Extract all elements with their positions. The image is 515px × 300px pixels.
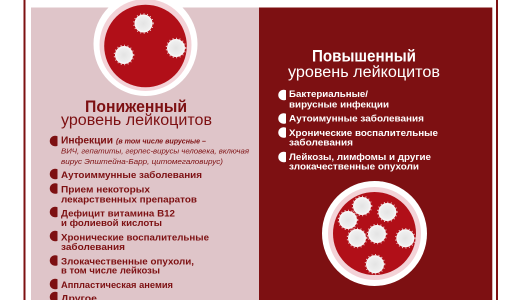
list: causes of high level (278, 89, 438, 172)
panel: low leukocytes (31, 0, 259, 300)
heading: high level (288, 48, 440, 81)
list: causes of high level: злокачественные опухоли (289, 161, 419, 172)
heading: low level: Пониженный (85, 98, 187, 116)
heading: low level (61, 98, 212, 129)
list: causes of low level: и фолиевой кислоты (61, 218, 162, 229)
list: causes of high level: Лейкозы, лимфомы и другие (289, 152, 431, 163)
list: causes of low level: Инфекции (61, 134, 113, 146)
heading: low level: уровень лейкоцитов (61, 112, 212, 129)
heading: high level: Повышенный (312, 48, 416, 66)
list: causes of high level: Бактериальные/ (289, 89, 368, 100)
list: causes of low level: (в том числе вирусные – (116, 136, 206, 145)
side rule right (496, 0, 498, 300)
heading: high level: уровень лейкоцитов (288, 64, 440, 81)
list: causes of low level: Аппластическая анемия (61, 280, 173, 291)
list: causes of low level (50, 134, 249, 300)
list: causes of low level: Прием некоторых (61, 185, 151, 196)
list: causes of low level: Злокачественные опухоли, (61, 256, 194, 267)
illustration: three white cells in a circle (94, 0, 198, 96)
list: causes of low level: лекарственных препаратов (61, 194, 197, 205)
side rule left (24, 0, 26, 300)
list: causes of low level: вирус Эпштейна-Барр, цитомегаловирус) (61, 157, 224, 166)
list: causes of high level: Хронические воспалительные (289, 128, 438, 139)
list: causes of low level: Хронические воспалительные (61, 233, 209, 244)
panel: high leukocytes (259, 8, 492, 300)
list: causes of low level: заболевания (61, 242, 125, 253)
list: causes of low level: Аутоиммунные заболевания (61, 170, 202, 181)
list: causes of low level: ВИЧ, гепатиты, герпес-вирусы человека, включая (61, 146, 249, 156)
list: causes of low level: в том числе лейкозы (61, 266, 160, 277)
illustration: seven white cells in a circle (322, 181, 427, 286)
list: causes of low level: Дефицит витамина В12 (61, 209, 175, 220)
list: causes of high level: заболевания (289, 137, 353, 148)
list: causes of high level: вирусные инфекции (289, 99, 389, 110)
list: causes of high level: Аутоимунные заболевания (289, 114, 424, 125)
